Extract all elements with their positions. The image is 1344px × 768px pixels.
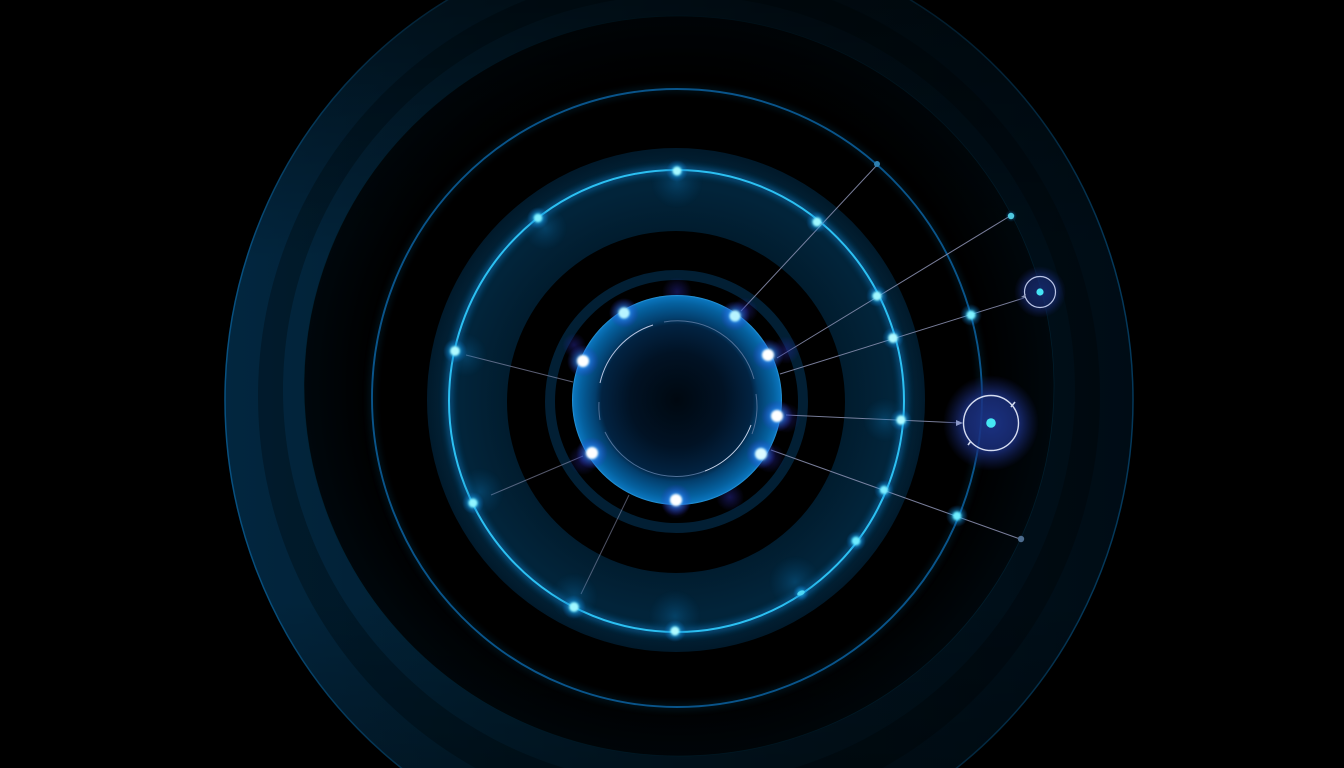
wide band <box>427 148 925 652</box>
middle ring nodes <box>946 304 982 527</box>
core inner arcs <box>599 321 757 476</box>
outer endpoints <box>874 161 1024 542</box>
orbit nodes <box>443 160 912 642</box>
connector lines <box>466 165 1024 594</box>
middle ring <box>372 89 982 707</box>
small target node <box>1014 266 1066 318</box>
inner halo ring <box>550 275 803 528</box>
large target node <box>943 375 1039 471</box>
orbit node blooms <box>443 156 907 642</box>
core nodes <box>567 298 793 516</box>
core purple glows <box>562 277 801 519</box>
bright orbit <box>449 170 904 632</box>
core sphere <box>572 295 782 505</box>
